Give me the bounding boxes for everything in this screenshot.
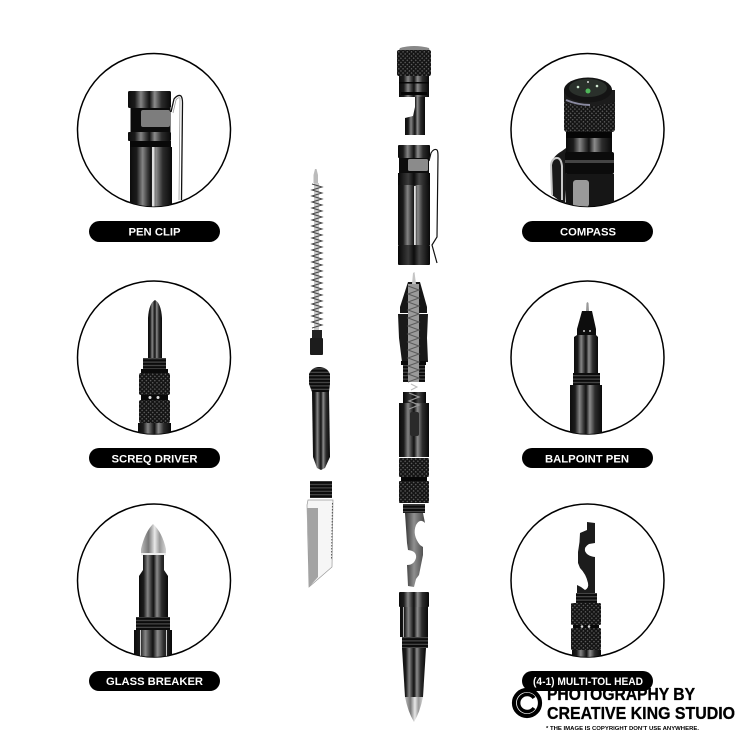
label: multi-tool head: (4-1) MULTI-TOL HEAD bbox=[533, 676, 643, 688]
credit line 2: CREATIVE KING STUDIO bbox=[547, 703, 735, 723]
label: multi-tool head bbox=[522, 671, 653, 691]
label: screw driver bbox=[89, 448, 220, 468]
detail circle: compass bbox=[511, 54, 664, 206]
label: ballpoint pen: BALPOINT PEN bbox=[545, 454, 629, 466]
label: ballpoint pen bbox=[522, 448, 653, 468]
exploded part: pen tip section bbox=[398, 272, 428, 390]
exploded part: pen clip barrel bbox=[398, 145, 438, 265]
exploded part: ink refill with spring bbox=[310, 169, 323, 355]
exploded part: knurled grip with multi-tool bbox=[399, 392, 429, 587]
label: pen clip: PEN CLIP bbox=[128, 226, 180, 238]
label: compass bbox=[522, 221, 653, 242]
credit line 1: PHOTOGRAPHY BY bbox=[547, 684, 695, 704]
panel: glass breaker bbox=[78, 504, 230, 659]
multi-tool blade bbox=[405, 513, 425, 587]
exploded part: compass cap bbox=[397, 46, 431, 135]
panel: ballpoint pen bbox=[511, 281, 664, 436]
copyright notice: * THE IMAGE IS COPYRIGHT DON'T USE ANYWHERE. bbox=[546, 726, 699, 732]
compass close-up bbox=[551, 78, 615, 209]
label: glass breaker: GLASS BREAKER bbox=[106, 676, 203, 688]
exploded part: knife blade bbox=[307, 481, 333, 587]
detail circle: ballpoint pen bbox=[511, 281, 664, 434]
ballpoint pen close-up bbox=[570, 302, 602, 436]
screw driver close-up bbox=[138, 300, 171, 436]
copyright icon bbox=[514, 690, 540, 716]
multi-tool close-up bbox=[571, 522, 601, 659]
detail circle: pen clip bbox=[78, 54, 230, 206]
exploded part: screwdriver bit bbox=[309, 367, 330, 470]
label: compass: COMPASS bbox=[560, 226, 616, 238]
exploded part: glass breaker end bbox=[399, 592, 429, 722]
detail circle: glass breaker bbox=[78, 504, 230, 657]
label: screw driver: SCREQ DRIVER bbox=[112, 454, 198, 466]
label: pen clip bbox=[89, 221, 220, 242]
label: glass breaker bbox=[89, 671, 220, 691]
watermark: photography credit bbox=[514, 684, 735, 732]
glass breaker close-up bbox=[134, 524, 172, 659]
panel: pen clip bbox=[78, 54, 230, 209]
panel: compass bbox=[511, 54, 664, 209]
pen clip close-up bbox=[128, 91, 182, 209]
panel: multi-tool head bbox=[511, 504, 664, 659]
detail circle: multi-tool head bbox=[511, 504, 664, 657]
panel: screw driver bbox=[78, 281, 230, 436]
detail circle: screw driver bbox=[78, 281, 230, 434]
